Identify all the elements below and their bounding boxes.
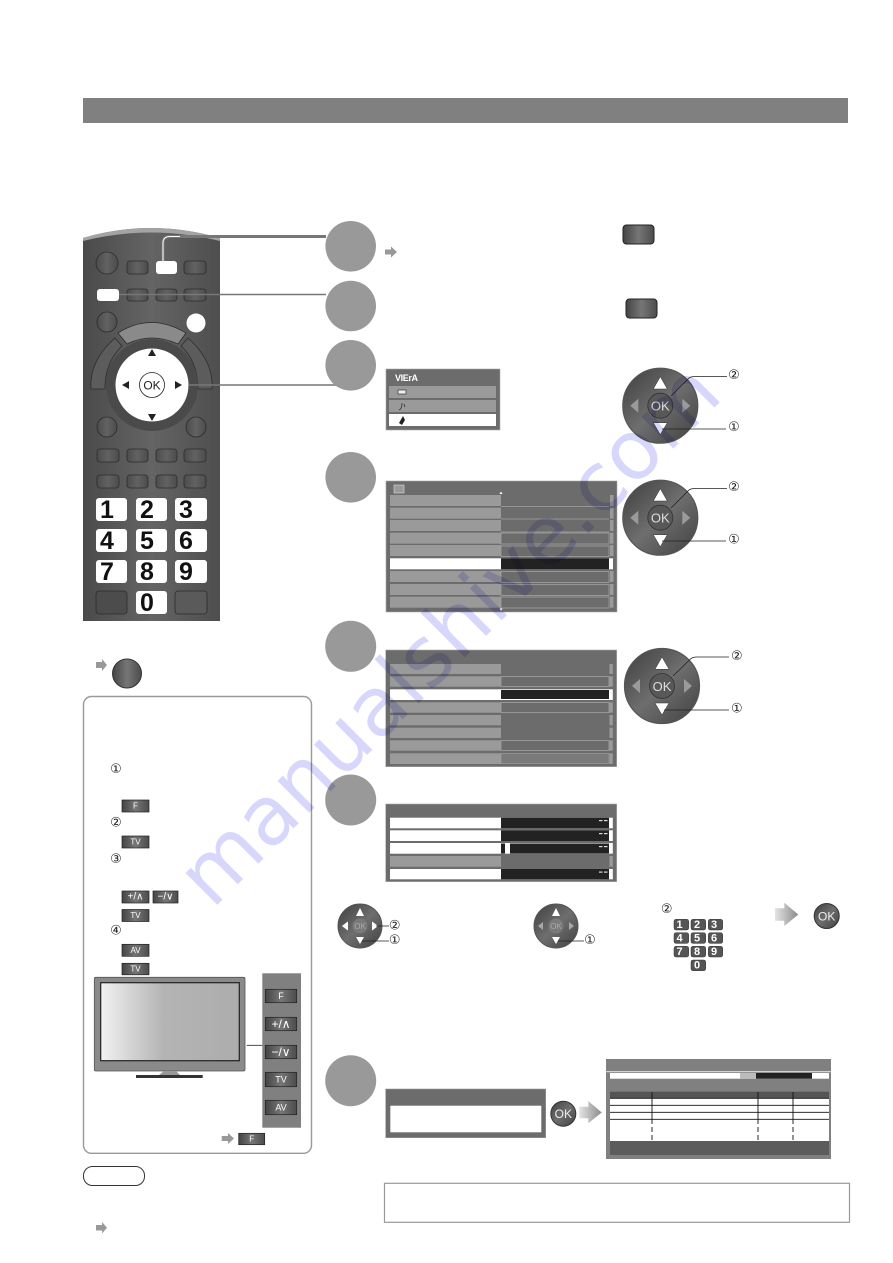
mini number pad: 9 xyxy=(711,946,717,958)
note arrow xyxy=(96,1222,107,1234)
number keys: 8 xyxy=(140,558,154,586)
OK button: OK xyxy=(555,1107,572,1121)
white buttons highlighted on remote xyxy=(97,261,177,301)
step numbers: ④ xyxy=(110,923,122,938)
button icon xyxy=(623,225,654,244)
F button reference xyxy=(222,1133,265,1145)
step numbers: ③ xyxy=(110,852,122,867)
mini number pad: 0 xyxy=(694,960,700,972)
menu: options list xyxy=(386,650,617,767)
arrow xyxy=(579,1101,602,1123)
remote body xyxy=(83,228,220,621)
dialog xyxy=(386,1089,546,1138)
dial: ① xyxy=(731,702,743,716)
small TV buttons: +/∧ xyxy=(128,892,143,902)
mini number pad: 3 xyxy=(711,919,717,931)
menu: setup list xyxy=(386,481,617,612)
menu: VIERA: VIErA xyxy=(395,373,418,383)
F button reference: F xyxy=(249,1134,254,1144)
mini number pad xyxy=(661,902,723,972)
dial xyxy=(623,368,740,443)
arrow and round button below remote xyxy=(96,659,142,688)
number keys: 4 xyxy=(100,527,114,555)
arrow xyxy=(775,903,798,926)
remote control: OK xyxy=(143,378,161,392)
small dial with two callouts xyxy=(338,904,401,948)
step 5 xyxy=(325,621,743,767)
mini number pad: 6 xyxy=(711,932,717,944)
side button panel: −/∨ xyxy=(271,1045,291,1059)
step 1 xyxy=(325,221,654,272)
watermark: manualshive.com xyxy=(159,344,739,924)
result screen xyxy=(606,1059,831,1159)
step 4 xyxy=(325,452,740,612)
step numbers: ① xyxy=(110,762,122,777)
OK button xyxy=(551,1101,576,1126)
mini number pad: 1 xyxy=(676,919,683,931)
mini number pad: 2 xyxy=(694,919,700,931)
small dial with one callout: ① xyxy=(584,933,596,948)
dial: ① xyxy=(728,532,740,548)
side button panel xyxy=(262,973,301,1128)
mini number pad: 5 xyxy=(694,932,700,944)
number keys: 6 xyxy=(179,527,193,555)
menu: VIERA xyxy=(386,369,500,430)
bottom note box xyxy=(384,1183,850,1222)
side button panel: TV xyxy=(275,1074,287,1084)
navigation dial xyxy=(106,339,198,431)
remote control xyxy=(83,228,220,621)
side button panel: +/∧ xyxy=(271,1017,291,1031)
number keys: 2 xyxy=(140,496,154,524)
small TV buttons: TV xyxy=(130,911,141,920)
header bar xyxy=(83,98,848,123)
OK button xyxy=(814,904,839,928)
step numbers xyxy=(110,762,122,938)
number keys: 9 xyxy=(179,558,193,586)
menu: value entry xyxy=(386,804,617,882)
dial: OK xyxy=(653,679,672,694)
dial xyxy=(624,648,743,724)
dial xyxy=(623,480,740,555)
side button panel: F xyxy=(278,991,284,1001)
small TV buttons: F xyxy=(133,802,138,810)
number keys: 3 xyxy=(179,496,193,524)
step 7 xyxy=(325,1055,831,1159)
button icon xyxy=(626,299,657,318)
dial: OK xyxy=(651,510,670,526)
number keys xyxy=(96,496,207,617)
small dial with one callout xyxy=(534,904,596,948)
dial: ② xyxy=(731,649,743,664)
mini number pad: 8 xyxy=(694,946,700,958)
OK button: OK xyxy=(818,910,835,924)
mini number pad: ② xyxy=(661,902,673,917)
small TV buttons: TV xyxy=(130,838,141,846)
note pill xyxy=(84,1166,144,1186)
connector lines from remote to steps xyxy=(119,236,352,385)
number keys: 1 xyxy=(100,496,114,524)
small dial with two callouts: ① xyxy=(389,933,401,948)
step 6 xyxy=(325,774,839,972)
number keys: 0 xyxy=(140,589,154,617)
mini number pad: 4 xyxy=(676,932,683,944)
mini number pad: 7 xyxy=(676,946,683,958)
dial: OK xyxy=(651,398,670,414)
small TV buttons: −/∨ xyxy=(158,892,173,902)
dial: ② xyxy=(728,480,740,495)
small dial with one callout: OK xyxy=(550,922,562,931)
navigation wedges xyxy=(118,322,186,344)
dial: ① xyxy=(728,420,740,435)
step 2 xyxy=(325,281,657,331)
number keys: 7 xyxy=(100,558,114,586)
small TV buttons: TV xyxy=(130,964,141,974)
step 3 xyxy=(325,340,740,443)
number keys: 5 xyxy=(140,527,154,555)
small dial with two callouts: ② xyxy=(389,918,401,934)
small TV buttons xyxy=(122,800,178,975)
step numbers: ② xyxy=(110,815,122,830)
television illustration xyxy=(94,977,245,1078)
dial: ② xyxy=(728,368,740,383)
panel: TV button instructions xyxy=(84,696,312,1153)
small TV buttons: AV xyxy=(130,946,141,955)
side button panel: AV xyxy=(275,1102,287,1112)
top row buttons xyxy=(96,252,206,332)
small dial with two callouts: OK xyxy=(354,922,366,931)
